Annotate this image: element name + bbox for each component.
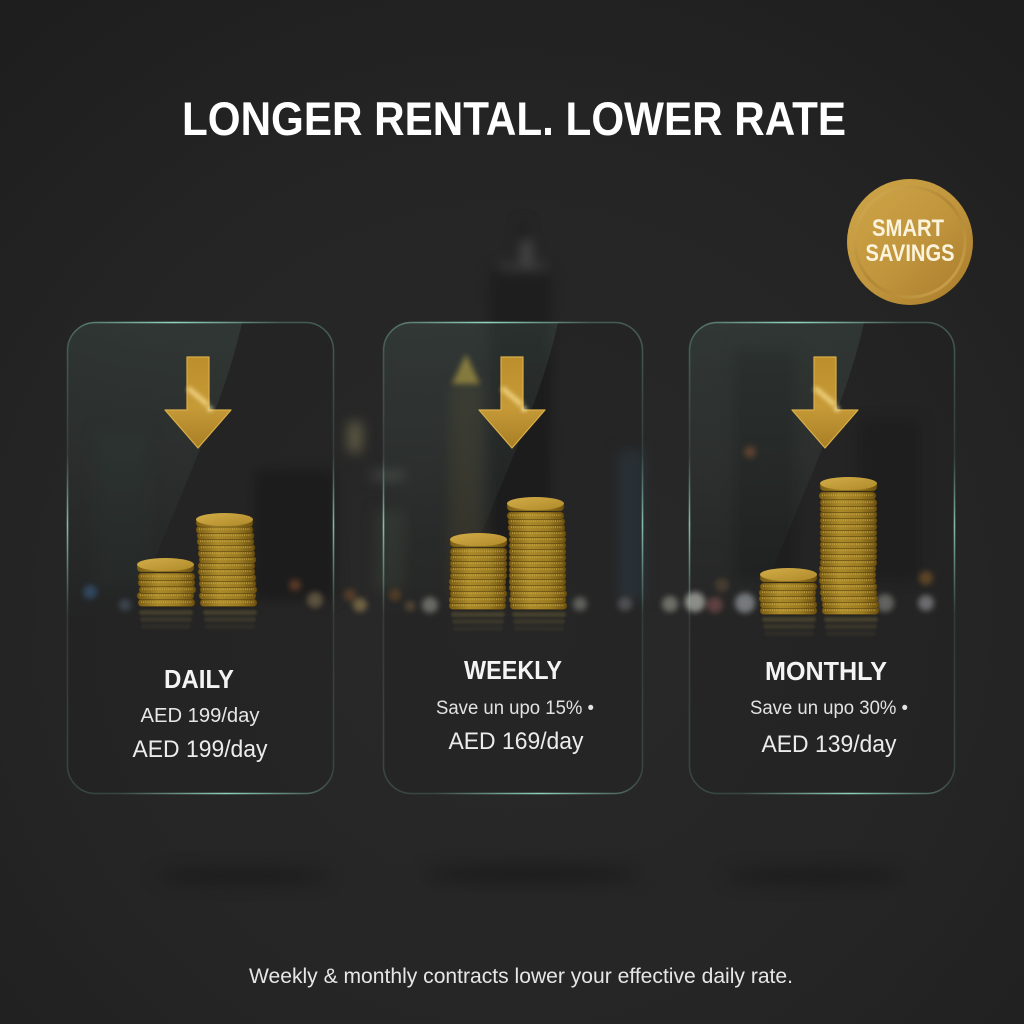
rate daily: AED 199/day [132, 736, 268, 763]
plan name monthly: MONTHLY [765, 656, 887, 686]
coin stacks monthly [759, 477, 879, 636]
icon: down arrow daily [165, 357, 231, 448]
blurred city skyline [83, 222, 934, 613]
panel: monthly [690, 322, 954, 794]
savings monthly: Save un upo 30% • [750, 698, 908, 719]
coin stacks weekly [449, 497, 567, 631]
title: LONGER RENTAL. LOWER RATE [182, 92, 846, 145]
icon: down arrow weekly [479, 357, 545, 448]
badge: smart savings: SAVINGS [866, 240, 954, 267]
card floor shadows [155, 867, 907, 882]
plan name daily: DAILY [164, 664, 234, 694]
icon: down arrow monthly [792, 357, 858, 448]
coin stacks daily [137, 513, 257, 629]
footer note: Weekly & monthly contracts lower your effective daily rate. [249, 965, 793, 988]
list price daily: AED 199/day [140, 705, 260, 727]
savings weekly: Save un upo 15% • [436, 698, 594, 719]
rate weekly: AED 169/day [448, 728, 584, 755]
rate monthly: AED 139/day [762, 731, 896, 758]
plan name weekly: WEEKLY [464, 655, 562, 685]
panel: weekly [384, 322, 642, 794]
badge: smart savings: SMART [872, 215, 944, 242]
badge: smart savings [847, 179, 973, 305]
panel: daily [68, 322, 334, 794]
